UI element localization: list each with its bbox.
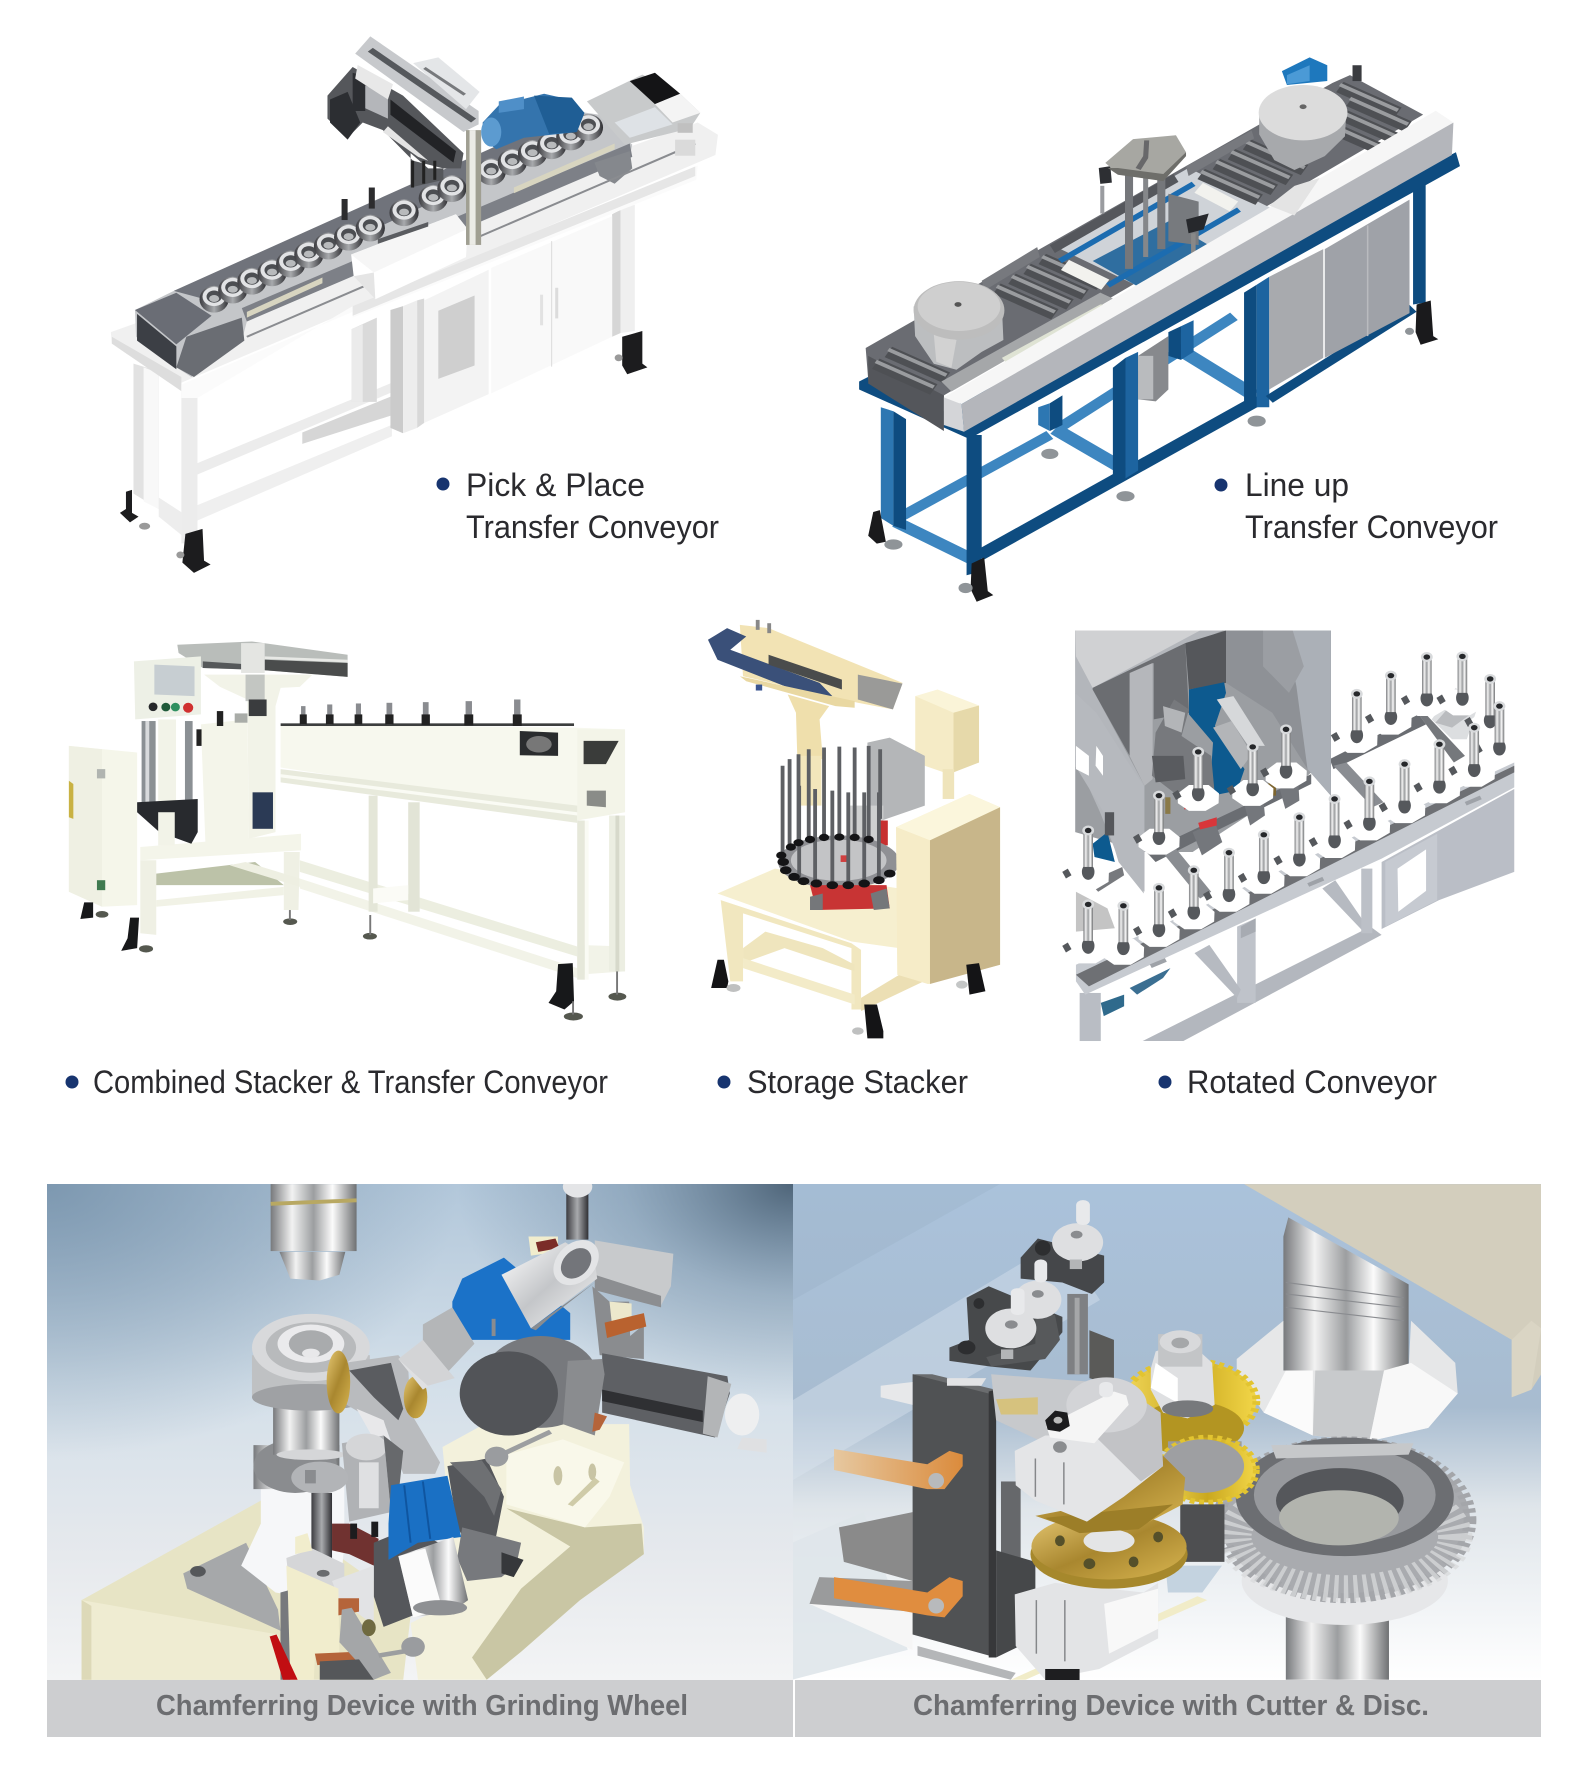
stacker arm with cable carrier (708, 620, 902, 709)
label: Line up Transfer Conveyor: Transfer Conveyor (1245, 509, 1498, 545)
cabinet with window (1382, 789, 1514, 929)
control cabinet (896, 794, 1000, 984)
round flange (460, 1319, 600, 1436)
enclosure left panel front (1075, 693, 1144, 893)
cabinet with window and doors (424, 216, 612, 423)
grey mounting plate (183, 1543, 280, 1631)
orange clamp handles (834, 1449, 963, 1617)
brass flange lower (1030, 1514, 1188, 1589)
label: Combined Stacker & Transfer Conveyor: Combined Stacker & Transfer Conveyor (93, 1064, 608, 1100)
panel: Storage Stacker machine (708, 620, 1000, 1038)
posts on the beam (300, 699, 522, 726)
sensors (342, 188, 375, 220)
right drum (1259, 85, 1347, 170)
bottom plate and white base (792, 1512, 1207, 1680)
support column and centre panel (196, 675, 313, 842)
hex bolt (1151, 1330, 1215, 1418)
screw adjuster block (563, 1353, 767, 1453)
table top beam (111, 122, 718, 398)
long transfer beam (281, 723, 625, 823)
guide bar left (941, 293, 1113, 391)
blue chute (1093, 682, 1265, 862)
label: Line up Transfer Conveyor (1214, 467, 1498, 545)
caption bar: cutter and disc (795, 1680, 1541, 1737)
machine frame legs and cross members (134, 205, 635, 543)
vertical gantry column (466, 130, 481, 245)
caption bar: cutter and disc: Chamferring Device with Cutter & Disc. (913, 1690, 1429, 1722)
upper spindle (271, 1184, 357, 1281)
label: Line up Transfer Conveyor: Line up (1245, 467, 1349, 503)
blue bracket (389, 1476, 461, 1560)
central column (241, 1314, 370, 1604)
elbow housing with gold discs (326, 1350, 440, 1474)
lead screws (1001, 1294, 1088, 1558)
gradient studio background (793, 1184, 1541, 1680)
workpiece rings on the conveyor (200, 114, 603, 313)
posts with tooling bases (1062, 651, 1520, 965)
bottom post and copper part (270, 1533, 391, 1680)
lower white body (1015, 1583, 1158, 1680)
caption bar: grinding wheel: Chamferring Device with Grinding Wheel (156, 1690, 688, 1722)
front rail (1076, 762, 1514, 995)
rear post and small box (915, 690, 979, 799)
red and brass parts (1165, 782, 1276, 829)
blue motor (481, 94, 584, 149)
black feet (711, 960, 985, 1038)
gradient studio background (47, 1184, 793, 1680)
side guards of the bed (982, 130, 1254, 291)
conveyor carriage track (1076, 774, 1311, 932)
clamp ring (447, 1459, 524, 1581)
label: Pick & Place Transfer Conveyor: Transfer Conveyor (466, 509, 719, 545)
blue upper rim beam (859, 152, 1460, 439)
blue frame lower rails (896, 316, 1259, 561)
cabinet doors (1269, 200, 1410, 389)
lower frame rails (300, 796, 625, 980)
panel: Chamfering Device with Cutter & Disc (792, 1184, 1541, 1680)
granite column (881, 1374, 996, 1658)
caption bar: grinding wheel (47, 1680, 793, 1737)
gripper assembly (327, 67, 463, 188)
plates and brass tab (991, 1374, 1086, 1658)
vertical arm support (788, 695, 829, 806)
label: Storage Stacker: Storage Stacker (747, 1064, 968, 1100)
blue motor mount with silver cylinder (398, 1234, 608, 1386)
storage turntable with rods (776, 746, 899, 910)
blue gear motor (1282, 57, 1362, 85)
internal cylinder station (1152, 699, 1215, 796)
white cover box (351, 214, 468, 299)
lower frame (1080, 869, 1382, 1041)
bench with legs (718, 869, 938, 1011)
enclosure back wall (1075, 631, 1331, 892)
control panel (134, 656, 201, 719)
long white top rail (944, 111, 1453, 432)
levelers (139, 354, 623, 558)
small cylinder stack (332, 1434, 403, 1566)
yellow pinion gears (1124, 1361, 1256, 1592)
label: Rotated Conveyor: Rotated Conveyor (1187, 1064, 1437, 1100)
platter with lift rods (1099, 135, 1196, 269)
upper white body (1015, 1377, 1163, 1522)
upper right beige housing (1244, 1184, 1541, 1397)
panel: Rotated Conveyor machine (1062, 631, 1520, 1041)
pin post (286, 1462, 348, 1592)
brass flange upper (1035, 1451, 1185, 1533)
conveyor belt (135, 111, 695, 377)
roller bed (866, 75, 1423, 431)
panel: Line up Transfer Conveyor machine (859, 57, 1460, 602)
panel: Combined Stacker & Transfer Conveyor machine (69, 641, 626, 1020)
blue frame legs (881, 182, 1426, 575)
left cabinet (69, 746, 137, 907)
rear mechanism (848, 738, 925, 845)
helical gear (1220, 1437, 1470, 1625)
cream machine base (82, 1424, 644, 1680)
dark mid block (332, 1536, 438, 1627)
black foot brackets (120, 331, 647, 573)
label: Pick & Place Transfer Conveyor (436, 467, 719, 545)
silver shaft and skirt (1237, 1217, 1458, 1680)
black feet and levelers (80, 902, 626, 1020)
white thumb knobs (985, 1200, 1103, 1359)
gantry (177, 641, 348, 677)
lift cylinder (1138, 336, 1168, 401)
enclosure right panel (1226, 631, 1331, 796)
dark upper clamp bars (949, 1238, 1114, 1386)
rear slide and copper plate (528, 1176, 673, 1359)
left drum (914, 281, 1004, 370)
grab handles (379, 1432, 551, 1657)
black foot brackets (868, 301, 1438, 602)
levelers (884, 328, 1414, 593)
stacker table (140, 834, 301, 935)
blue lift arms and white rollers (1060, 184, 1239, 285)
label: Pick & Place Transfer Conveyor: Pick & Place (466, 467, 645, 503)
conveyor rollers (876, 85, 1408, 389)
lower silver roll (398, 1537, 468, 1617)
conveyor end box (587, 73, 700, 156)
panel: Pick & Place Transfer Conveyor machine (111, 36, 718, 573)
panel: Chamfering Device with Grinding Wheel (47, 1176, 793, 1680)
gantry rail (355, 36, 480, 132)
rear track (1330, 688, 1482, 807)
stacker rods (137, 719, 198, 845)
